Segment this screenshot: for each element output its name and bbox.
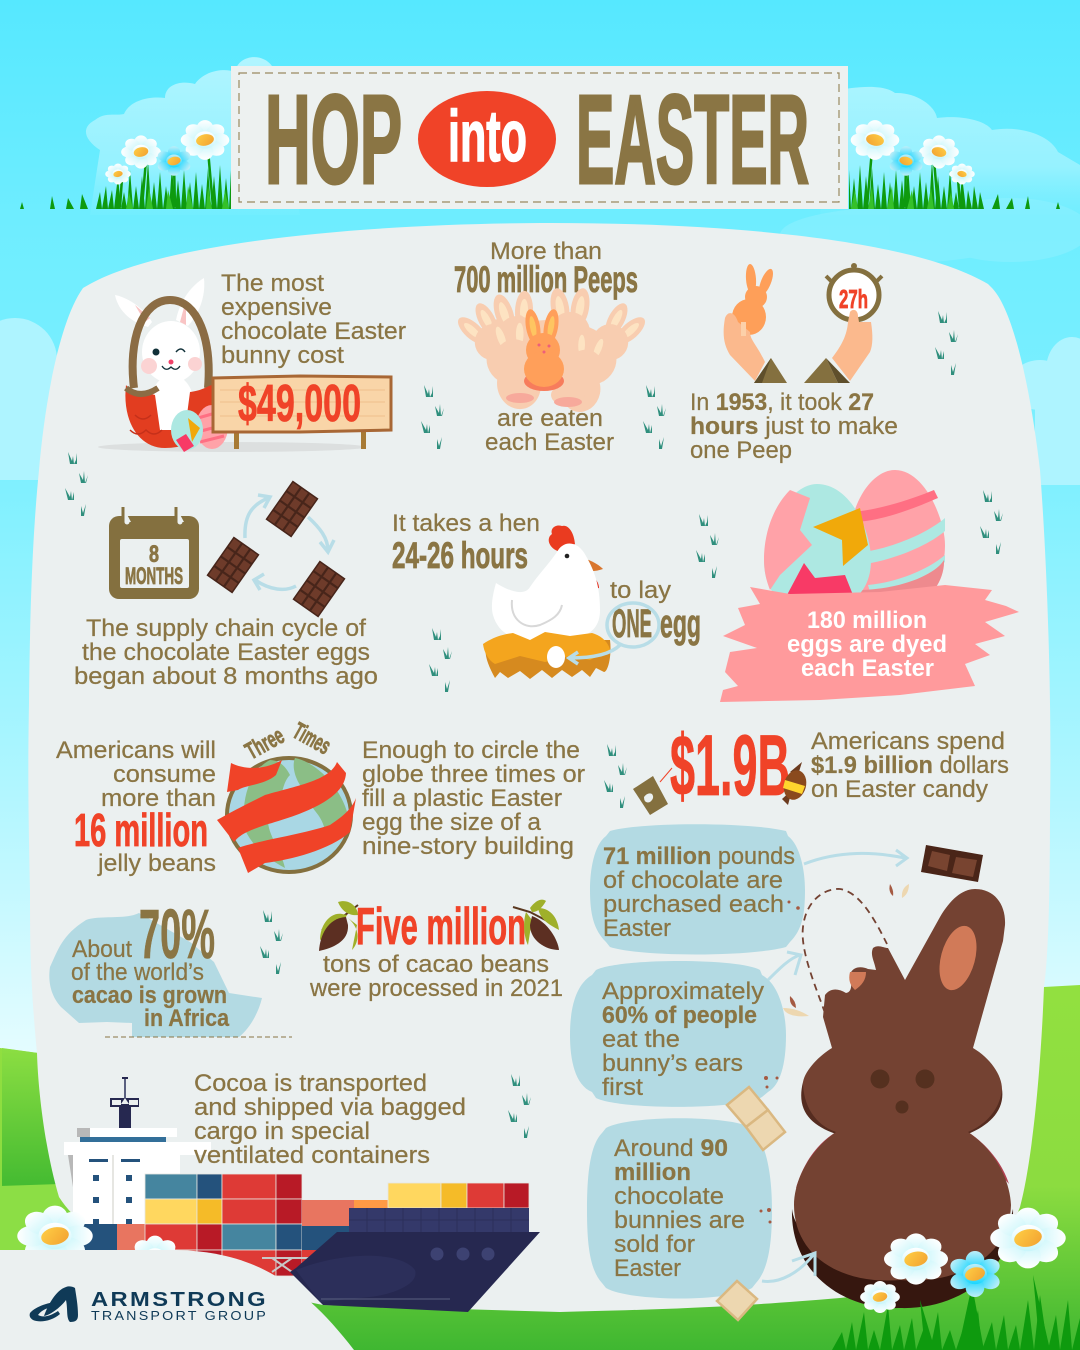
pink brush stroke banner — [720, 585, 1019, 702]
text: 16 million jelly beans — [56, 737, 216, 877]
icon: bunny in basket — [115, 278, 228, 452]
text: 60 percent: bunny’s ears — [602, 1050, 743, 1077]
text: eggs stat — [787, 607, 947, 682]
text: 90 million: bunnies are — [614, 1207, 745, 1234]
callout ring: ONE — [569, 603, 659, 664]
text: cocoa shipping: cargo in special — [194, 1118, 370, 1145]
text: cocoa shipping: Cocoa is transported — [194, 1070, 427, 1097]
text: eggs stat: 180 million — [807, 607, 927, 634]
icon: hen on nest — [483, 525, 611, 679]
panel: candy spending — [633, 718, 1009, 815]
text: globe comparison: egg the size of a — [362, 809, 542, 836]
label: Three Times: Three — [241, 722, 289, 765]
text: 90 million: chocolate — [614, 1183, 724, 1210]
text: cacao tons — [309, 951, 563, 1002]
icon: 8 months calendar — [109, 507, 199, 599]
icon: chocolate bunny — [792, 889, 1013, 1308]
title: into badge: into — [448, 97, 527, 177]
text: 90 million: Easter — [614, 1255, 681, 1282]
text: peeps stat: each Easter — [485, 429, 614, 456]
right grass and flowers — [849, 120, 1060, 209]
text: cacao tons: were processed in 2021 — [309, 975, 563, 1002]
logo tagline: TRANSPORT GROUP — [91, 1308, 268, 1323]
text: candy spend: on Easter candy — [811, 776, 988, 803]
text: 70 percent cacao: of the world’s — [71, 959, 204, 986]
decorative grass tufts — [65, 311, 1003, 1138]
text: 60 percent: 60% of people — [602, 1002, 757, 1029]
text: candy spend — [811, 728, 1009, 803]
icon: left cacao pod — [319, 901, 358, 951]
text: supply chain — [74, 615, 378, 690]
text: 1953 peep — [690, 389, 898, 464]
heading: Five million: Five million — [356, 898, 526, 956]
panel: 60 percent ears first — [570, 952, 801, 1107]
text: peeps stat: More than — [490, 238, 602, 265]
icon: chocolate cycle — [208, 482, 344, 616]
text: 90 million: million — [614, 1159, 691, 1186]
icon: 8 months calendar: MONTHS — [125, 563, 183, 590]
text: 16 million jelly beans: Americans will — [56, 737, 216, 764]
panel: supply chain — [74, 482, 378, 690]
text: hen stat: to lay — [610, 577, 671, 604]
icon: ship — [64, 1077, 540, 1312]
text: 70 percent cacao: About — [72, 936, 132, 963]
logo wordmark: ARMSTRONG — [91, 1289, 268, 1311]
text: most expensive bunny: bunny cost — [221, 342, 344, 369]
icon: milk chocolate bar and drips — [783, 845, 983, 1016]
text: 60 percent — [602, 978, 764, 1101]
decorative crumbs — [760, 900, 800, 1224]
text: 90 million: Around 90 — [614, 1135, 728, 1162]
text: 70 percent cacao: 70% — [139, 895, 215, 973]
text: cacao tons: tons of cacao beans — [323, 951, 549, 978]
arrow to ear — [768, 952, 801, 980]
arrow to bunny — [762, 1253, 815, 1281]
text: 90 million — [614, 1135, 745, 1282]
panel: 700 million peeps — [451, 238, 652, 456]
text: peeps stat — [454, 238, 638, 456]
text: 60 percent: Approximately — [602, 978, 764, 1005]
text: 60 percent: eat the — [602, 1026, 680, 1053]
text: 16 million jelly beans: jelly beans — [97, 850, 216, 877]
text: hen stat: ONE — [612, 602, 652, 646]
label: Three Times: Times — [288, 718, 335, 760]
panel: bunny in basket with price — [98, 270, 406, 452]
icon: right cacao pod — [513, 900, 559, 950]
text: 16 million jelly beans: 16 million — [74, 804, 208, 856]
text: 60 percent: first — [602, 1074, 643, 1101]
text: globe comparison — [362, 737, 585, 860]
text: most expensive bunny: The most — [221, 270, 324, 297]
text: 71 million: of chocolate are — [603, 867, 783, 894]
price: $49,000 — [238, 375, 361, 433]
top grass and flowers — [20, 120, 1060, 209]
text: 16 million jelly beans: consume — [113, 761, 216, 788]
icon: Armstrong logo — [30, 1286, 78, 1322]
title: into badge — [418, 91, 556, 187]
icon: hands with peep and stopwatch — [724, 263, 882, 383]
text: supply chain: The supply chain cycle of — [86, 615, 366, 642]
text: hen stat — [392, 510, 701, 646]
panel: 180 million eggs — [720, 470, 1019, 702]
icon: Africa map — [49, 913, 262, 1037]
text: most expensive bunny: chocolate Easter — [221, 318, 406, 345]
icon: price tag — [633, 768, 672, 815]
label: Three Times — [241, 718, 335, 765]
text: most expensive bunny: expensive — [221, 294, 332, 321]
text: 71 million: Easter — [603, 915, 671, 942]
text: 71 million: purchased each — [603, 891, 784, 918]
text: hen stat: egg — [660, 602, 701, 646]
text: 90 million: sold for — [614, 1231, 695, 1258]
text: hen stat: 24-26 hours — [392, 535, 528, 576]
panel: five million cacao — [309, 898, 563, 1002]
stopwatch label: 27h — [839, 284, 868, 314]
text: supply chain: the chocolate Easter eggs — [82, 639, 370, 666]
text: eggs stat: each Easter — [801, 655, 934, 682]
text: candy spend: Americans spend — [811, 728, 1005, 755]
text: cocoa shipping — [194, 1070, 466, 1169]
icon: 8 months calendar: 8 — [149, 541, 159, 568]
text: 1953 peep: hours just to make — [690, 413, 898, 440]
text: globe comparison: globe three times or — [362, 761, 585, 788]
text: 71 million: 71 million pounds — [603, 843, 795, 870]
bottom grass and flowers — [17, 1206, 1080, 1350]
text: candy spend: $1.9 billion dollars — [811, 752, 1009, 779]
text: 1953 peep: one Peep — [690, 437, 792, 464]
text: 71 million — [603, 843, 795, 942]
panel: 27 hours per peep — [690, 263, 898, 464]
panel: jelly beans — [56, 718, 585, 877]
icon: globe with ribbon — [217, 718, 356, 873]
text: 16 million jelly beans: more than — [101, 785, 216, 812]
text: cocoa shipping: and shipped via bagged — [194, 1094, 466, 1121]
title: HOP: HOP — [265, 69, 402, 210]
icon: pile of peeps — [451, 287, 652, 416]
text: eggs stat: eggs are dyed — [787, 631, 947, 658]
dashed missing ear — [803, 889, 887, 1013]
text: globe comparison: fill a plastic Easter — [362, 785, 562, 812]
text: 70 percent cacao — [71, 895, 230, 1032]
text: 70 percent cacao: cacao is grown — [72, 982, 227, 1009]
text: 70 percent cacao: in Africa — [144, 1005, 230, 1032]
text: globe comparison: Enough to circle the — [362, 737, 580, 764]
panel: chocolate bunny — [783, 845, 1013, 1308]
panel: 90 million bunnies — [587, 1118, 815, 1298]
arrow to chocolate bar — [804, 850, 907, 866]
text: supply chain: began about 8 months ago — [74, 663, 378, 690]
left grass and flowers — [20, 120, 231, 209]
text: peeps stat: 700 million Peeps — [454, 259, 638, 300]
panel: hen lays egg — [392, 510, 701, 679]
wooden price sign — [213, 375, 391, 449]
text: cocoa shipping: ventilated containers — [194, 1142, 430, 1169]
panel: 71 million pounds — [590, 824, 907, 954]
text: most expensive bunny — [221, 270, 406, 369]
clouds — [0, 57, 1080, 485]
stat: $1.9B: $1.9B — [670, 718, 790, 814]
text: globe comparison: nine-story building — [362, 833, 574, 860]
text: 1953 peep: In 1953, it took 27 — [690, 389, 874, 416]
green hills — [0, 985, 1080, 1350]
title banner — [231, 66, 848, 210]
panel: cargo ship — [64, 1070, 540, 1312]
icon: wrapped candy — [780, 762, 810, 805]
text: hen stat: It takes a hen — [392, 510, 540, 537]
logo panel — [0, 1250, 354, 1350]
icon: white chocolate pieces — [717, 1087, 785, 1320]
title banner: EASTER — [576, 69, 809, 210]
text: peeps stat: are eaten — [497, 405, 603, 432]
main panel background — [28, 223, 1050, 1312]
icon: dyed eggs — [764, 470, 945, 610]
